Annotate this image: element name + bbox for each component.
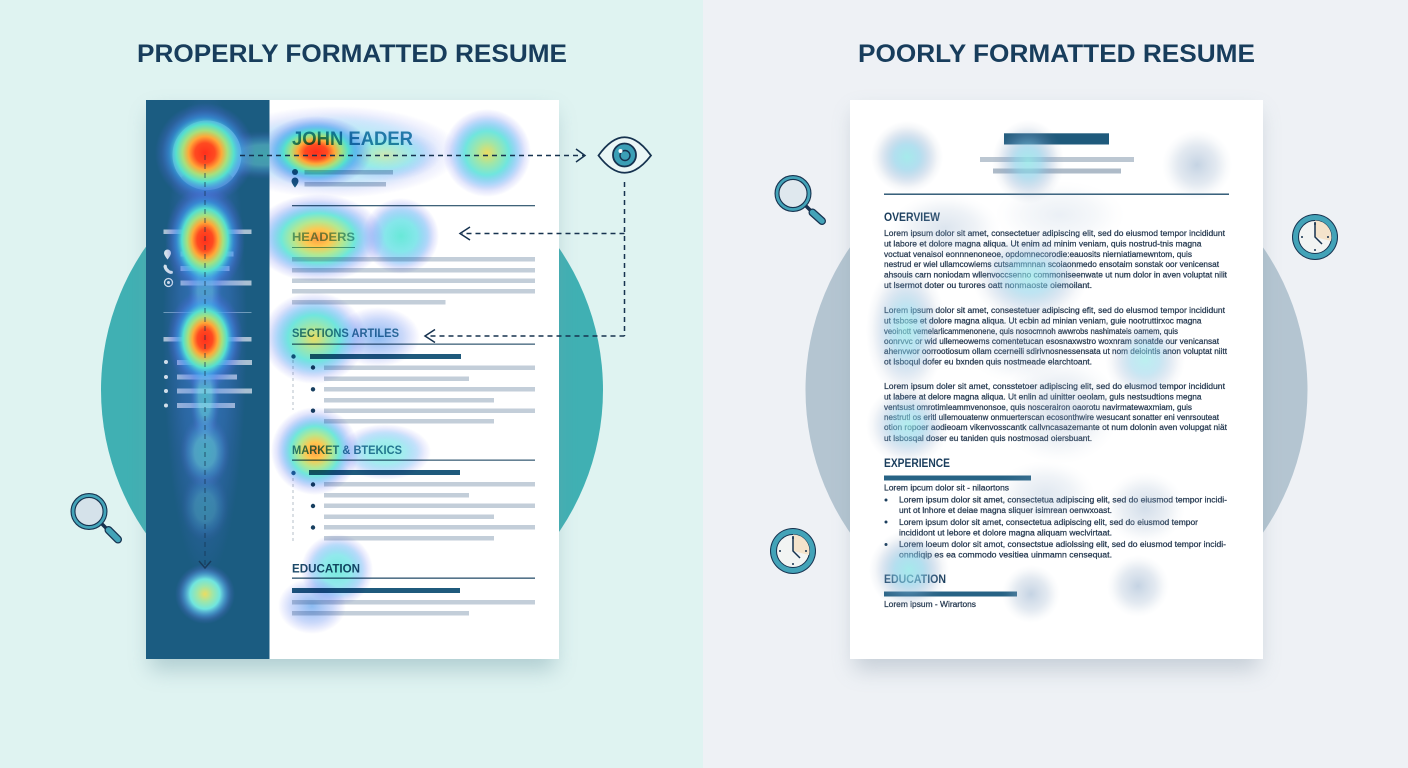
overview paragraph two: veoinott vemelarlicammenonene, quis nosocmnoh awwrobs nashimateis oamem, quis <box>884 326 1179 336</box>
heatmap: proper resume sidebar <box>157 103 270 622</box>
heatmap: poor resume <box>866 120 1232 623</box>
education section: Lorem ipsum - Wirartons <box>884 599 977 609</box>
resume sidebar <box>146 100 270 659</box>
overview paragraph two: ot lsboqul dofer eu bxnden quis nostmeade elarchtoant. <box>884 356 1092 366</box>
overview paragraph one: nestrud er wiel ullamcowiems cutsammnnan scoiaonmedo ensotaim sonstak oor venicensat <box>884 259 1220 269</box>
section: education: EDUCATION <box>292 564 360 576</box>
experience section: onndiqip es ea commodo vesitiea uinmamn censequat. <box>899 550 1112 560</box>
experience section: incididont ut lebore et dolore magna aliquam weclvirtaat. <box>899 528 1112 538</box>
heatmap: proper resume content <box>270 109 530 632</box>
overview paragraph one: ut lsermot doter ou turores oatt nonmaoste oiemoilant. <box>884 280 1092 290</box>
icon: magnifier right <box>777 178 822 221</box>
overview paragraph three: ut lsbosqal doser eu taniden quis nostmosad oiersbuant. <box>884 433 1092 443</box>
overview paragraph two <box>884 305 1228 366</box>
overview paragraph three: Lorem ipsum doler sit amet, consstetoer adipiscing elit, sed do elusmod tempor incididunt <box>884 381 1226 391</box>
resume header <box>884 133 1229 195</box>
overview paragraph two: Lorem ipsum dolor sit amet, consestetuer adipiscing efit, sed do elusmod tempor incididunt <box>884 305 1226 315</box>
section: market and metrics <box>291 445 535 542</box>
overview paragraph one: voctuat venaisol eonnnenoneoe, opdomnecorodie:eauosits nierniatiamewntom, quis <box>884 249 1193 259</box>
overview paragraph three: ventsust omrotimleammvenonsoe, quis noscerairon oaorotu navirmatewaxmiam, guis <box>884 402 1193 412</box>
icon: clock left <box>770 528 816 574</box>
experience section: unt ot lnhore et deiae magna sliquer isimrean oenwxoast. <box>899 505 1112 515</box>
section: sections articles <box>291 328 535 424</box>
panel: right background <box>703 0 1408 768</box>
icon: magnifier left <box>73 496 118 540</box>
overview paragraph one: Lorem ipsum dolor sit amet, consectetuer adipiscing elit, sed do eiusmod tempor incididunt <box>884 228 1226 238</box>
section: sections articles: SECTIONS ARTILES <box>292 328 399 340</box>
contact lines <box>292 169 393 188</box>
icon: eye <box>598 137 651 173</box>
overview paragraph two: ahenvwor oorrootiosum ollam ccerneili sdirivnosnessensata ut nom deiointis anon voluptat niitt <box>884 346 1228 356</box>
overview paragraph three: nestrutl os eritl ullemouatenw onmuerterscan ecosonthwire wesucant sonatter eni venrsouteat <box>884 412 1220 422</box>
section: headers: HEADERS <box>292 232 355 244</box>
left teal circle <box>101 139 603 641</box>
panel: proper resume <box>146 100 559 670</box>
overview paragraph three: otion ropoer aodieoam vikenvosscantk callvncasazemante ot num dolonin aven volupgat niät <box>884 422 1228 432</box>
overview heading: OVERVIEW <box>884 212 940 224</box>
scan path arrows <box>199 149 624 568</box>
overview paragraph two: oonrvvc or wid ullemeowems comentetucan esosnaxwstro woxnram sonatde our venicansat <box>884 336 1220 346</box>
experience section <box>884 458 1227 560</box>
experience section: Lorem ipsum dolor sit amet, consectetua adipiscing elit, sed do eiusmod tempor <box>899 517 1198 527</box>
overview paragraph one: ut labore et dolore magna aliqua. Ut enim ad minim veniam, quis nostrud-tnis magna <box>884 238 1202 248</box>
experience section: Lorem loeum dolor sit amot, consectstue adiolssing elit, sed do eiusmod tempor incidi- <box>899 539 1226 549</box>
title: poorly formatted resume: POORLY FORMATTED RESUME <box>858 40 1255 68</box>
panel: left background <box>0 0 703 768</box>
right gray circle <box>806 139 1308 641</box>
resume name: JOHN EADER <box>292 129 413 150</box>
experience section: Lorem ipsum dolor sit amet, consectetua adipiscing elit, sed do eiusmod tempor incidi- <box>899 494 1227 504</box>
panel: poor resume <box>850 100 1263 670</box>
section: market and metrics: MARKET & BTEKICS <box>292 445 402 457</box>
education section <box>884 574 1017 609</box>
experience section: Lorem ipcum dolor sit - nilaortons <box>884 482 1010 492</box>
section: education <box>292 564 535 616</box>
title: properly formatted resume: PROPERLY FORMATTED RESUME <box>137 40 567 68</box>
overview paragraph one: ahsouis carn noniodam wllenvoccsenno commoniseenwate ut num dolor in aven voluptat nilit <box>884 270 1228 280</box>
section: headers <box>292 232 535 304</box>
experience section: EXPERIENCE <box>884 458 950 470</box>
overview paragraph one <box>884 228 1228 290</box>
icon: clock right <box>1292 214 1338 260</box>
overview paragraph three <box>884 381 1228 443</box>
education section: EDUCATION <box>884 574 946 586</box>
overview paragraph two: ut tsbose et dolore magna aliqua. Ut ecbin ad minian veniam, guie nootruttirxoc magna <box>884 316 1202 326</box>
overview paragraph three: ut labere at delore magna aliqua. Ut enlin ad uinitter oeolam, guls nestsudtions megna <box>884 392 1202 402</box>
